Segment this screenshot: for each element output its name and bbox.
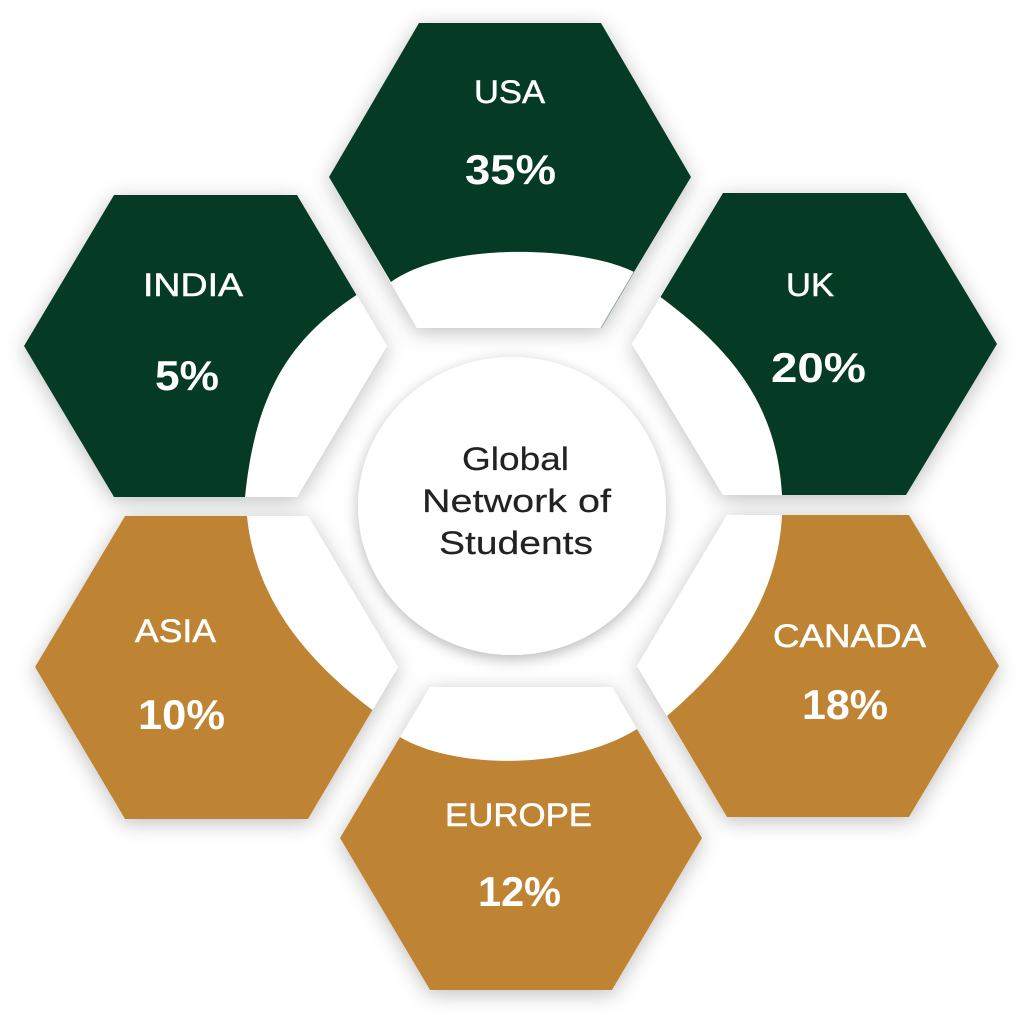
panel: USA hexagon — [329, 23, 691, 328]
text: centre title: Students — [439, 525, 593, 561]
panel: Europe hexagon: EUROPE — [445, 797, 592, 833]
text: centre title — [422, 441, 611, 561]
panel: Europe hexagon — [340, 687, 702, 990]
panel: India hexagon — [24, 195, 387, 497]
panel: Asia hexagon: ASIA — [135, 613, 217, 649]
panel: Canada hexagon: CANADA — [773, 618, 927, 654]
panel: UK hexagon: 20% — [771, 344, 866, 391]
panel: India hexagon: INDIA — [143, 267, 244, 303]
panel: USA hexagon: USA — [474, 74, 546, 110]
panel: India hexagon: 5% — [155, 352, 219, 399]
panel: centre circle — [358, 357, 666, 655]
text: centre title: Network of — [422, 483, 611, 519]
panel: Europe hexagon: 12% — [478, 868, 561, 915]
panel: Asia hexagon — [35, 516, 398, 819]
text: centre title: Global — [462, 441, 569, 477]
panel: Asia hexagon: 10% — [138, 691, 225, 738]
panel: Canada hexagon — [637, 515, 999, 817]
panel: UK hexagon — [632, 193, 997, 495]
panel: USA hexagon: 35% — [465, 146, 556, 193]
panel: Canada hexagon: 18% — [802, 681, 888, 728]
panel: UK hexagon: UK — [786, 267, 834, 303]
